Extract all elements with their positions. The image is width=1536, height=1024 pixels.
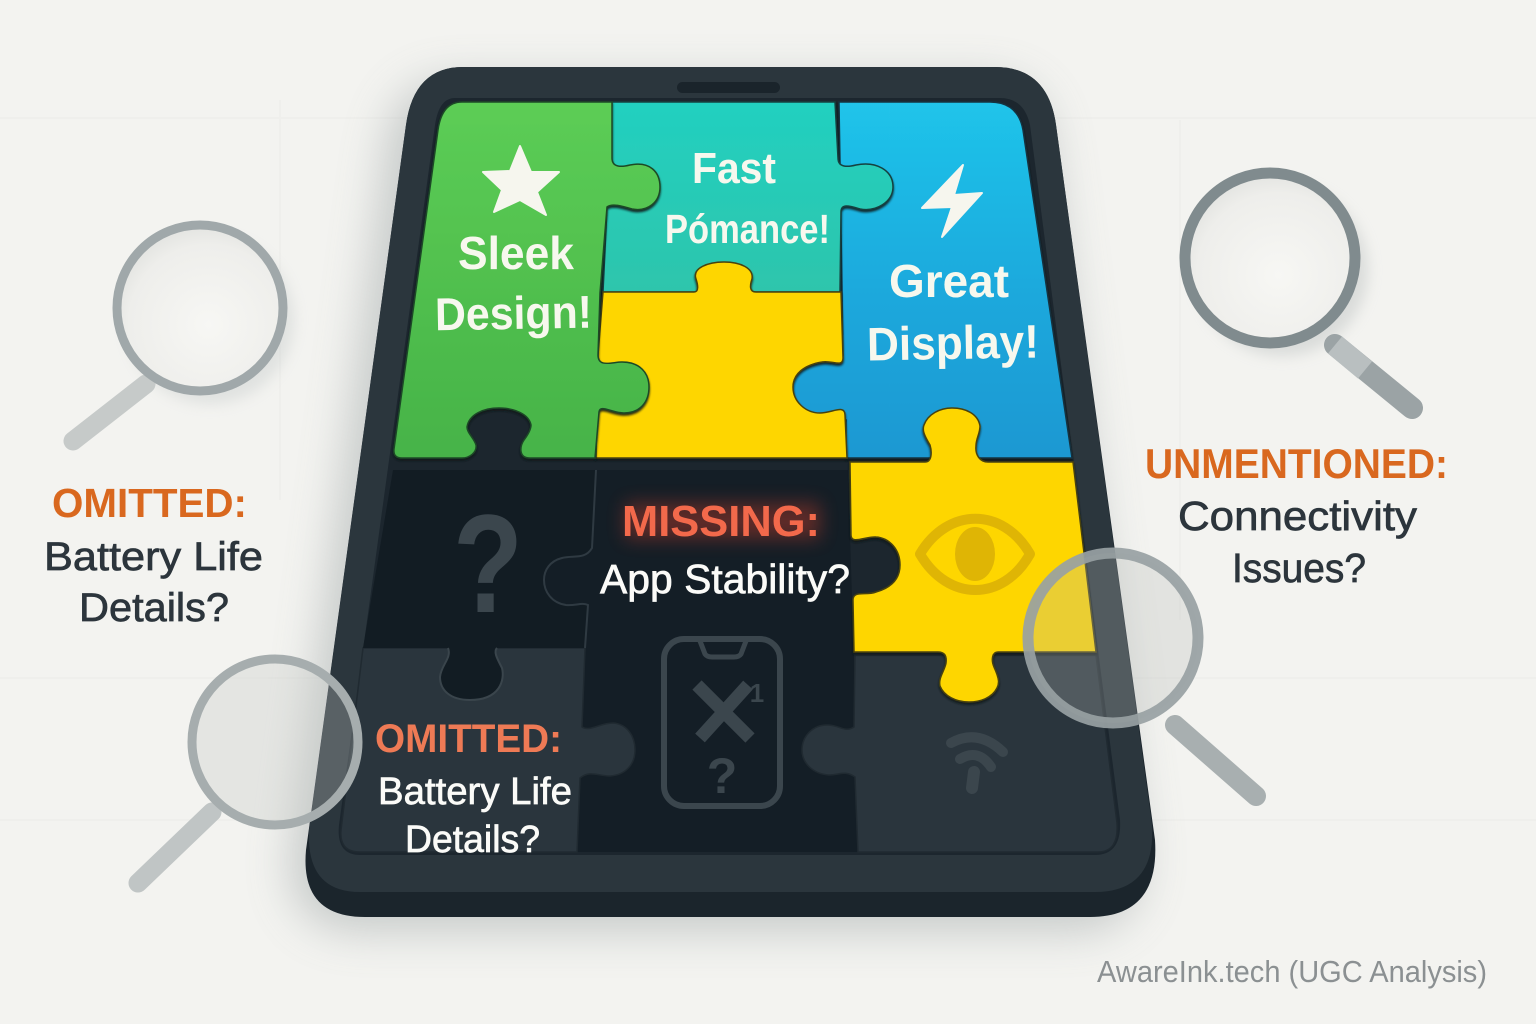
label: missing app stability — [600, 497, 850, 602]
piece: teal — [603, 102, 893, 292]
label: fast performance — [665, 144, 830, 252]
label: fast performance: Fast — [692, 144, 776, 193]
label: sleek design: Sleek — [458, 227, 574, 279]
screen recess — [339, 98, 1120, 855]
callout: omitted left: Details? — [79, 586, 229, 630]
label: sleek design: Design! — [435, 286, 592, 340]
magnifier: top right — [1185, 173, 1412, 408]
piece: yellow center — [596, 262, 847, 458]
magnifier: bottom right — [1028, 553, 1256, 796]
callout: unmentioned right: Issues? — [1232, 545, 1366, 591]
label: omitted inside tablet: Details? — [405, 819, 540, 861]
callout: unmentioned right — [1145, 440, 1448, 591]
callout: omitted left: OMITTED: — [52, 480, 247, 526]
dark piece: bottom right — [802, 655, 1117, 852]
dark piece: top left — [363, 470, 596, 700]
callout: omitted left — [44, 480, 263, 630]
tablet device — [290, 67, 1155, 932]
label: omitted inside tablet — [375, 717, 572, 861]
label: missing app stability: App Stability? — [600, 556, 850, 602]
icon: star — [483, 146, 559, 215]
icon: question mark: ? — [453, 485, 523, 642]
callout: unmentioned right: Connectivity — [1178, 493, 1418, 539]
label: missing app stability: MISSING: — [622, 497, 820, 546]
piece: green — [394, 102, 660, 458]
dark piece: bottom left — [341, 648, 635, 852]
icon: wifi — [951, 737, 1003, 788]
piece: yellow right — [850, 408, 1096, 702]
icon: phone with x: 1 — [750, 678, 764, 708]
icon: phone with x: ? — [707, 748, 737, 804]
piece: blue — [785, 102, 1072, 458]
icon: eye — [920, 519, 1030, 590]
label: omitted inside tablet: OMITTED: — [375, 717, 562, 761]
label: fast performance: Pómance! — [665, 206, 830, 252]
label: great display: Great — [889, 255, 1009, 307]
label: great display: Display! — [867, 314, 1039, 370]
source credit: AwareInk.tech (UGC Analysis) — [1097, 954, 1487, 989]
magnifier: top left — [73, 225, 294, 441]
callout: unmentioned right: UNMENTIONED: — [1145, 440, 1448, 487]
icon: lightning bolt — [922, 165, 982, 237]
dark piece: center knob — [544, 470, 700, 648]
label: sleek design — [435, 227, 592, 340]
notch pill — [677, 82, 780, 93]
magnifier: bottom left — [138, 659, 358, 883]
icon: phone with x — [664, 639, 780, 806]
label: great display — [867, 255, 1039, 370]
label: omitted inside tablet: Battery Life — [378, 771, 572, 813]
dark piece: center missing slot — [577, 470, 860, 852]
callout: omitted left: Battery Life — [44, 535, 263, 579]
